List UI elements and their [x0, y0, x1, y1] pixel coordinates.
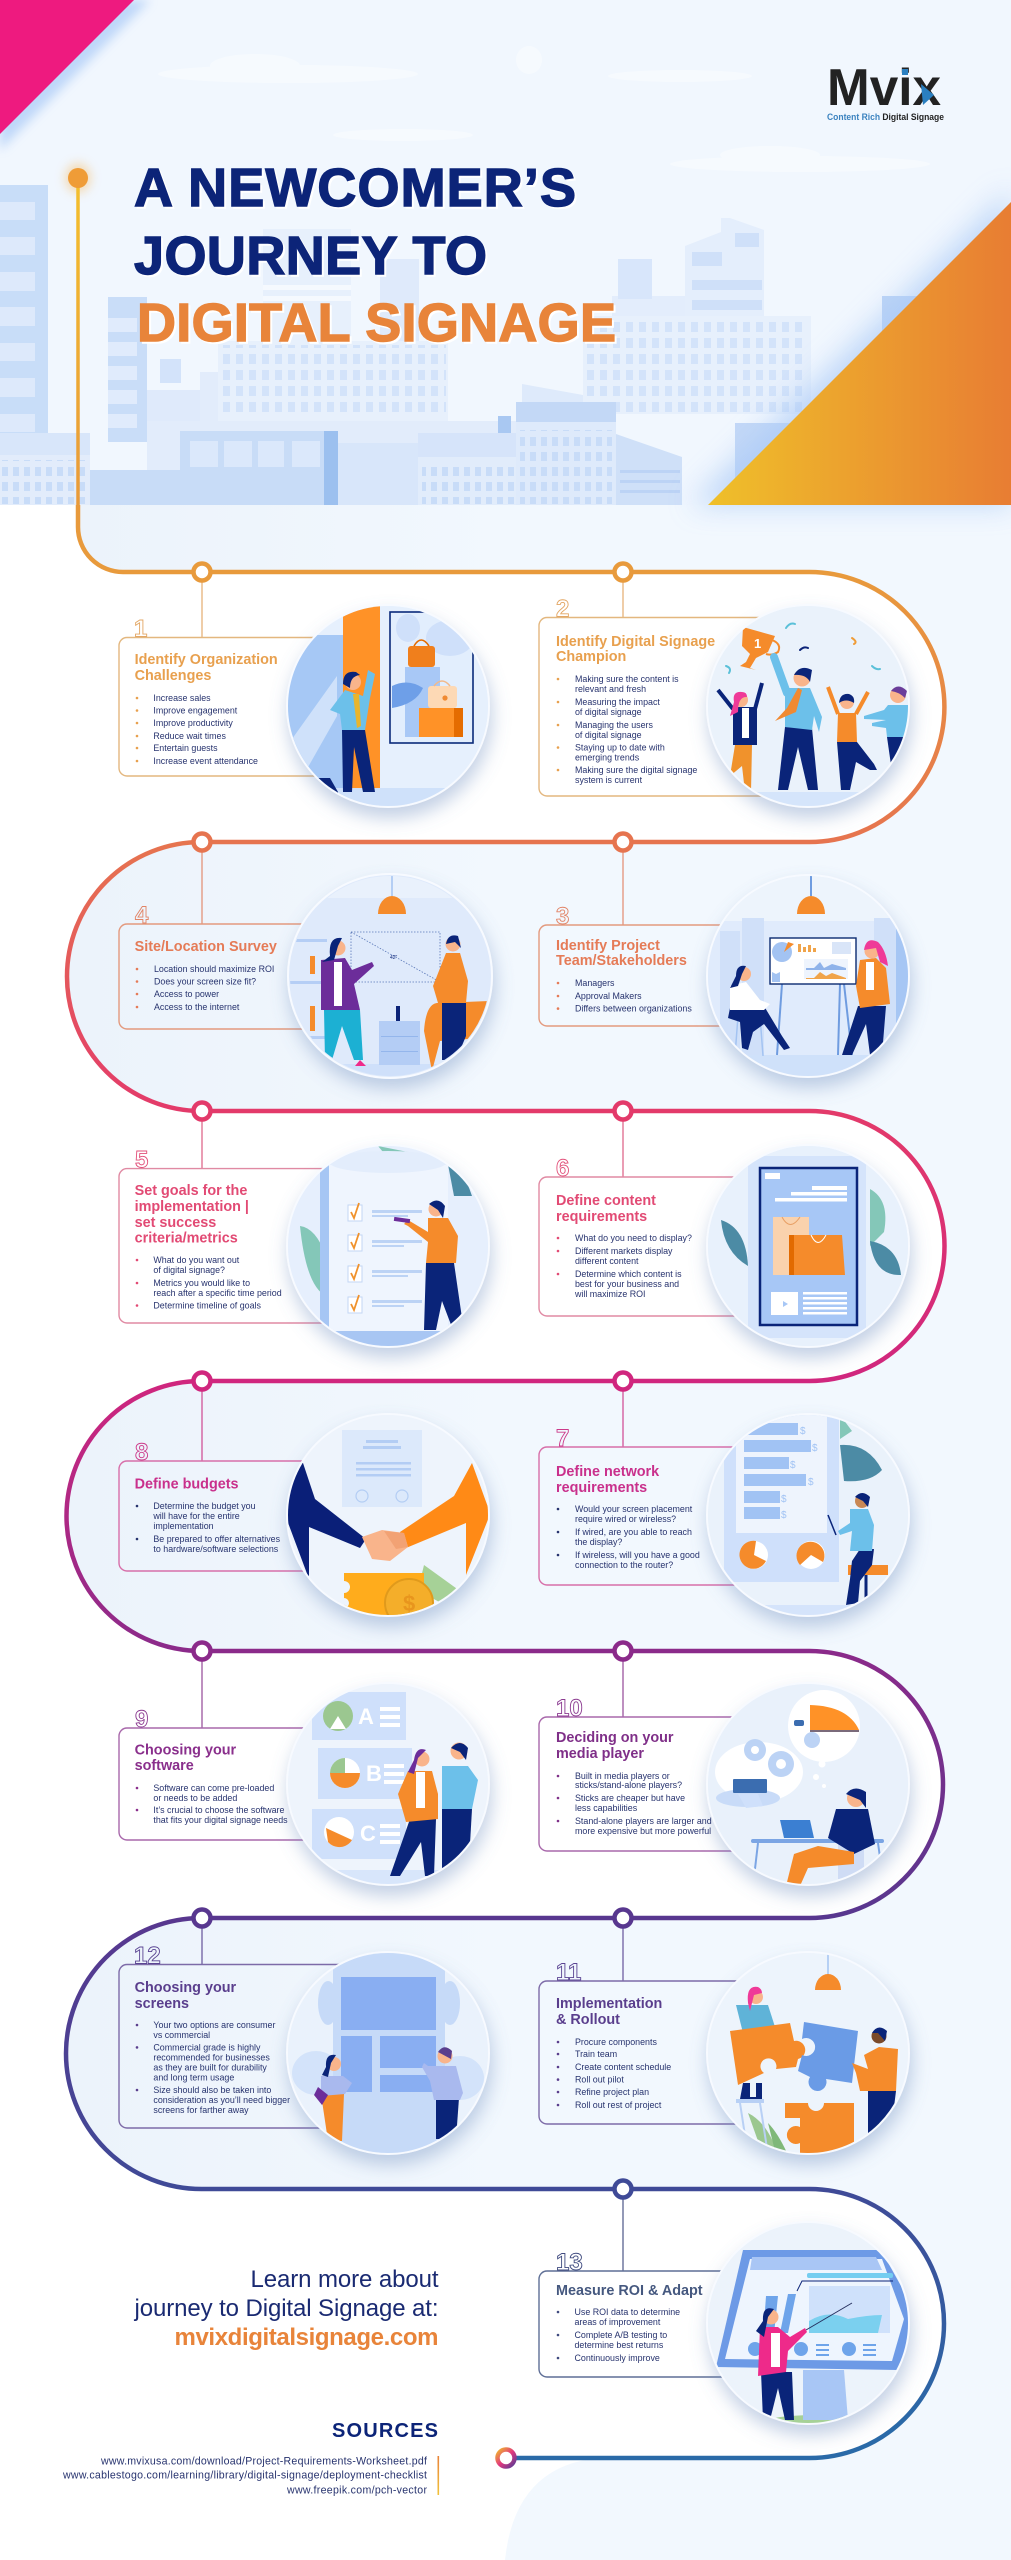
bullet list: Refine project plan	[575, 2087, 649, 2097]
illustration: confused man at shop window	[287, 604, 489, 808]
call to action text: journey to Digital Signage at:	[134, 2295, 438, 2322]
illustration: team reviewing dashboard	[707, 874, 909, 1078]
skyline	[0, 185, 922, 505]
bullet list: to hardware/software selections	[153, 1544, 279, 1554]
bullet list: Making sure the content is	[575, 674, 679, 684]
panel: step 3	[539, 874, 909, 1078]
bullet list: It’s crucial to choose the software	[153, 1805, 285, 1815]
bullet list: connection to the router?	[575, 1560, 673, 1570]
bullet list: Complete A/B testing to	[574, 2330, 667, 2340]
sources list: www.mvixusa.com/download/Project-Requirements-Worksheet.pdf	[100, 2456, 427, 2468]
illustration: handshake and money: $	[403, 1591, 415, 1616]
bullet list: Procure components	[575, 2037, 657, 2047]
bullet list	[136, 1501, 281, 1554]
bullet list: Continuously improve	[574, 2353, 660, 2363]
bullet list	[136, 2020, 290, 2115]
bullet list	[136, 1783, 288, 1825]
heading: Set goals for the	[135, 1183, 247, 1199]
call to action text: Learn more about	[250, 2266, 439, 2293]
illustration: network usage dashboard with man on laptop: $	[781, 1510, 787, 1521]
heading: Champion	[556, 649, 626, 665]
heading: implementation |	[135, 1199, 249, 1215]
bullet list: Determine timeline of goals	[153, 1300, 261, 1310]
panel: step 6	[539, 1144, 909, 1348]
panel: step 10	[539, 1682, 909, 1886]
step number: 7	[556, 1425, 569, 1452]
bullet list: If wired, are you able to reach	[575, 1527, 692, 1537]
bullet list: Staying up to date with	[575, 742, 665, 752]
bullet list: different content	[575, 1256, 639, 1266]
illustration: site survey measuring wall: 42"	[390, 955, 398, 961]
call to action text	[134, 2266, 439, 2351]
bullet list	[136, 693, 258, 766]
path nodes	[194, 564, 632, 2466]
illustration: network usage dashboard with man on laptop: $	[808, 1477, 814, 1488]
heading	[556, 1996, 662, 2028]
bullet list: vs commercial	[153, 2030, 210, 2040]
bullet list: Access to the internet	[154, 1002, 240, 1012]
logo: Content Rich Digital Signage	[827, 112, 944, 122]
heading: software	[135, 1758, 194, 1774]
sources list	[62, 2456, 427, 2496]
bullet list: implementation	[153, 1521, 214, 1531]
bullet list: Location should maximize ROI	[154, 964, 274, 974]
sources heading: SOURCES	[332, 2420, 438, 2442]
bullet list: Does your screen size fit?	[154, 976, 256, 986]
step number: 12	[134, 1942, 161, 1970]
illustration: digital display with shopping bags	[707, 1144, 909, 1348]
heading	[556, 938, 687, 969]
bullet list: system is current	[575, 775, 643, 785]
bullet list: and long term usage	[153, 2072, 234, 2082]
heading: requirements	[556, 1209, 647, 1225]
heading	[556, 1464, 660, 1496]
illustration: team celebrating with trophy: 1	[754, 636, 761, 651]
panel: step 11	[539, 1951, 909, 2155]
step number: 9	[135, 1706, 148, 1733]
bullet list: or needs to be added	[153, 1793, 237, 1803]
bullet list: Managing the users	[575, 720, 654, 730]
panel: step 5	[119, 1144, 489, 1348]
bullet list: Increase sales	[153, 693, 211, 703]
heading: & Rollout	[556, 2012, 620, 2028]
bullet list	[557, 978, 692, 1014]
bullet list: recommended for businesses	[153, 2052, 270, 2062]
heading: media player	[556, 1746, 644, 1762]
heading: Define budgets	[135, 1476, 239, 1492]
panel: step 13	[539, 2221, 916, 2427]
bullet list: Size should also be taken into	[153, 2085, 271, 2095]
bullet list: Your two options are consumer	[153, 2020, 275, 2030]
heading	[135, 1980, 237, 2012]
heading: Site/Location Survey	[135, 939, 277, 955]
heading: screens	[135, 1996, 189, 2012]
bullet list: Stand-alone players are larger and	[575, 1816, 712, 1826]
illustration: team celebrating with trophy	[716, 622, 908, 806]
illustration: network usage dashboard with man on laptop: $	[812, 1443, 818, 1454]
illustration: team assembling puzzle	[730, 1954, 898, 2153]
journey path	[66, 505, 944, 2458]
heading: Identify Organization	[135, 652, 278, 668]
heading	[135, 652, 278, 684]
connector lines	[202, 572, 623, 2271]
sources list: www.freepik.com/pch-vector	[286, 2484, 427, 2496]
title: A NEWCOMER’S	[134, 158, 576, 218]
heading	[556, 634, 715, 665]
bullet list: of digital signage	[575, 707, 642, 717]
pink corner triangle	[0, 0, 134, 134]
step number: 11	[556, 1959, 581, 1986]
bullet list: Different markets display	[575, 1246, 673, 1256]
bullet list: sticks/stand-alone players?	[575, 1780, 682, 1790]
bullet list: Be prepared to offer alternatives	[153, 1534, 281, 1544]
step number: 1	[134, 616, 147, 642]
illustration: network usage dashboard with man on laptop: $	[800, 1426, 806, 1437]
bullet list: Reduce wait times	[153, 731, 226, 741]
heading	[556, 1193, 656, 1225]
panel: step 8	[119, 1413, 489, 1627]
bullet list: areas of improvement	[574, 2317, 661, 2327]
bullet list: Software can come pre-loaded	[153, 1783, 274, 1793]
sources list: www.cablestogo.com/learning/library/digital-signage/deployment-checklist	[62, 2470, 427, 2482]
bullet list: Determine which content is	[575, 1269, 682, 1279]
illustration: network usage dashboard with man on laptop: $	[781, 1494, 787, 1505]
heading: requirements	[556, 1480, 647, 1496]
bullet list	[557, 1771, 712, 1836]
bullet list: will have for the entire	[152, 1511, 240, 1521]
bullet list: Managers	[575, 978, 615, 988]
illustration: site survey measuring wall	[288, 874, 492, 1078]
illustration: comparing software options: A	[358, 1704, 374, 1729]
bullet list: What do you need to display?	[575, 1233, 692, 1243]
heading: criteria/metrics	[135, 1231, 238, 1247]
heading	[556, 1730, 674, 1762]
bullet list: Roll out pilot	[575, 2075, 624, 2085]
bullet list	[557, 1233, 692, 1299]
bullet list	[557, 2037, 671, 2110]
orange corner triangle	[708, 202, 1011, 505]
bullet list: emerging trends	[575, 752, 640, 762]
bullet list: relevant and fresh	[575, 684, 646, 694]
heading: Challenges	[135, 668, 211, 684]
step number: 8	[135, 1439, 148, 1466]
illustration: choosing screens video wall	[287, 1951, 489, 2155]
bullet list	[557, 2307, 680, 2363]
step number: 13	[556, 2249, 583, 2276]
heading	[135, 1742, 237, 1774]
step number: 10	[556, 1695, 583, 1722]
bullet list: Differs between organizations	[575, 1004, 692, 1014]
bullet list: determine best returns	[574, 2340, 664, 2350]
title: JOURNEY TO	[134, 226, 487, 286]
bullet list: the display?	[575, 1537, 622, 1547]
bullet list: Entertain guests	[153, 743, 218, 753]
bullet list: best for your business and	[575, 1279, 679, 1289]
illustration: comparing software options	[312, 1692, 478, 1884]
heading: Identify Project	[556, 938, 660, 954]
bullet list: Approval Makers	[575, 991, 642, 1001]
illustration: man ticking checklist	[300, 1146, 472, 1346]
panel: step 7	[539, 1413, 909, 1617]
heading: Define content	[556, 1193, 656, 1209]
bullet list: screens for farther away	[153, 2105, 249, 2115]
heading: Team/Stakeholders	[556, 953, 687, 969]
clouds	[158, 46, 930, 172]
call to action text: mvixdigitalsignage.com	[174, 2324, 438, 2351]
illustration: man thinking about media player	[715, 1690, 884, 1884]
illustration: network usage dashboard with man on laptop	[724, 1415, 888, 1615]
panel: step 1	[119, 604, 489, 808]
bullet list: that fits your digital signage needs	[153, 1815, 288, 1825]
panel: step 12	[119, 1942, 489, 2155]
illustration: network usage dashboard with man on laptop: $	[790, 1460, 796, 1471]
bullet list: Built in media players or	[575, 1771, 670, 1781]
step number: 5	[135, 1147, 148, 1174]
bullet list: consideration as you’ll need bigger	[153, 2095, 290, 2105]
bullet list: Improve productivity	[153, 718, 233, 728]
heading: Deciding on your	[556, 1730, 674, 1746]
bullet list: as they are built for durability	[153, 2062, 267, 2072]
bullet list: Roll out rest of project	[575, 2100, 662, 2110]
bullet list: Metrics you would like to	[153, 1278, 250, 1288]
bullet list: less capabilities	[575, 1803, 638, 1813]
bullet list: Train team	[575, 2049, 617, 2059]
title: DIGITAL SIGNAGE	[137, 293, 616, 353]
heading: Choosing your	[135, 1742, 237, 1758]
step number: 4	[135, 902, 149, 929]
illustration: handshake and money	[288, 1430, 488, 1615]
step number: 2	[556, 596, 569, 622]
panel: step 9	[119, 1682, 489, 1886]
step number: 6	[556, 1155, 569, 1182]
bullet list: of digital signage	[575, 730, 642, 740]
background: light serpentine band	[66, 505, 1011, 2560]
heading: Identify Digital Signage	[556, 634, 715, 650]
illustration: comparing software options: C	[360, 1821, 376, 1846]
bullet list: If wireless, will you have a good	[575, 1550, 700, 1560]
bullet list: Access to power	[154, 989, 219, 999]
bullet list: Increase event attendance	[153, 756, 258, 766]
bullet list: Commercial grade is highly	[153, 2042, 261, 2052]
bullet list: Determine the budget you	[153, 1501, 256, 1511]
triangle glow	[0, 0, 1011, 505]
panel: step 2	[539, 596, 909, 808]
sources accent bar	[438, 2456, 439, 2495]
heading: Implementation	[556, 1996, 662, 2012]
bullet list: Improve engagement	[153, 706, 238, 716]
bullet list: require wired or wireless?	[575, 1514, 676, 1524]
bullet list	[136, 964, 274, 1012]
logo: Mvix	[827, 59, 941, 117]
heading: Measure ROI & Adapt	[556, 2283, 703, 2299]
bullet list: Would your screen placement	[575, 1504, 693, 1514]
heading: Define network	[556, 1464, 660, 1480]
panel: step 4	[119, 874, 492, 1078]
bullet list: of digital signage?	[153, 1265, 225, 1275]
heading: Choosing your	[135, 1980, 237, 1996]
bullet list: reach after a specific time period	[153, 1288, 282, 1298]
header panel	[0, 0, 1011, 505]
bullet list	[557, 1504, 700, 1570]
bullet list	[136, 1255, 282, 1310]
illustration: comparing software options: B	[366, 1761, 382, 1786]
bullet list: will maximize ROI	[574, 1289, 646, 1299]
title	[134, 158, 616, 353]
heading: set success	[135, 1215, 216, 1231]
bullet list: more expensive but more powerful	[575, 1826, 711, 1836]
bullet list	[557, 674, 697, 785]
bullet list: What do you want out	[153, 1255, 240, 1265]
step number: 3	[556, 903, 569, 930]
bullet list: Sticks are cheaper but have	[575, 1793, 685, 1803]
heading	[135, 1183, 249, 1247]
bullet list: Making sure the digital signage	[575, 765, 697, 775]
bullet list: Use ROI data to determine	[574, 2307, 680, 2317]
bullet list: Measuring the impact	[575, 697, 660, 707]
illustration: presenter at large monitor	[716, 2250, 908, 2423]
journey start lamp	[65, 163, 91, 505]
bullet list: Create content schedule	[575, 2062, 671, 2072]
